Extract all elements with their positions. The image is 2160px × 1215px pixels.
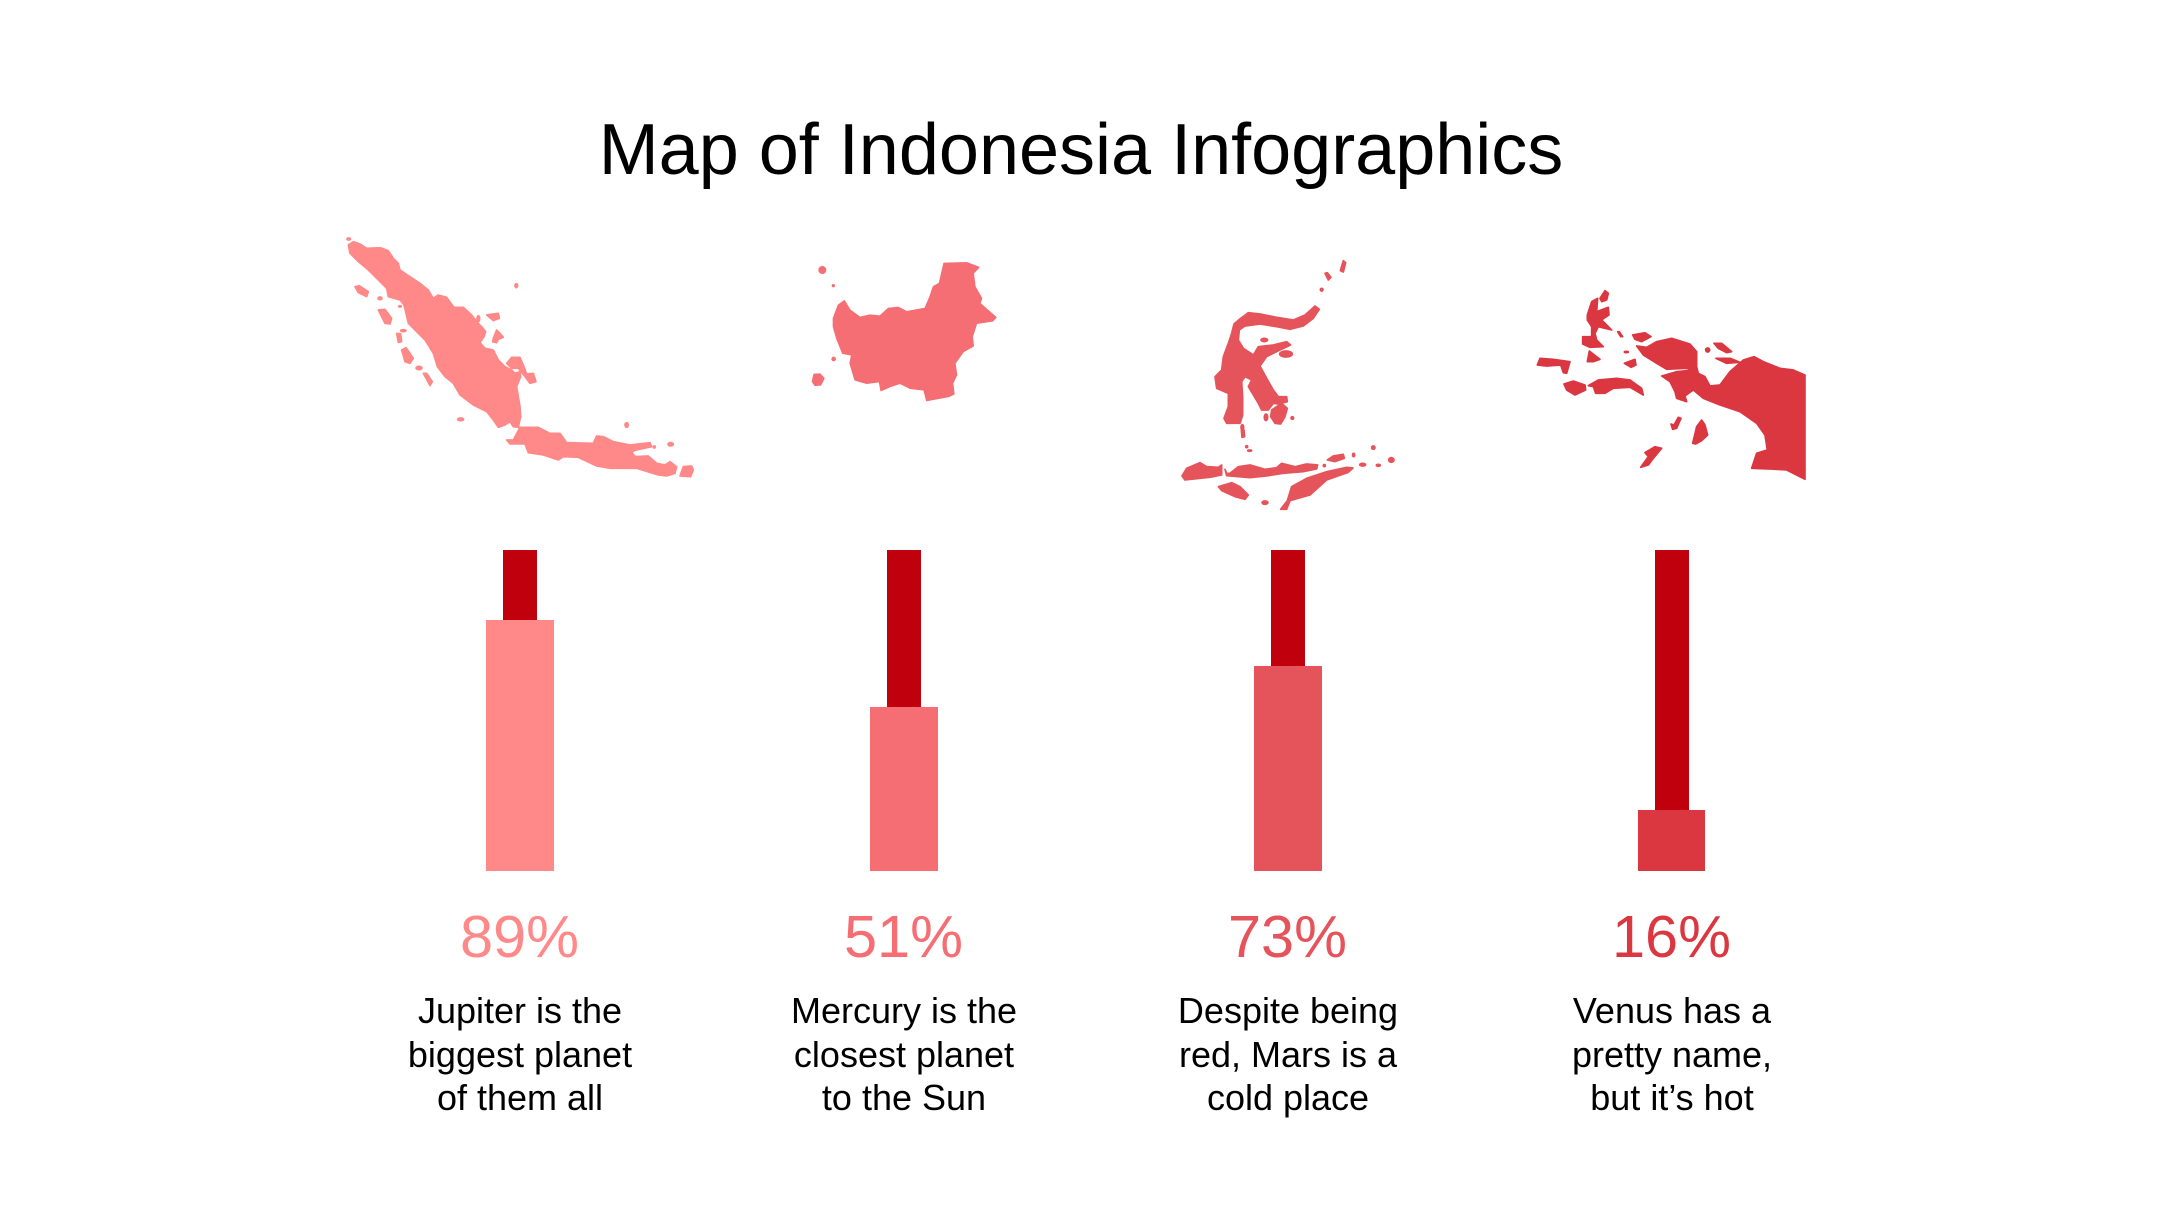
value bar	[870, 707, 938, 871]
map: Sumatra and Java	[347, 238, 693, 477]
map: Kalimantan	[812, 263, 996, 401]
track	[887, 550, 921, 707]
bar chart column 1	[486, 550, 554, 871]
description Mars: red, Mars is a	[1179, 1034, 1397, 1074]
description Mars: Despite being	[1178, 990, 1398, 1031]
description Jupiter: of them all	[437, 1077, 603, 1118]
description Venus: but it’s hot	[1590, 1077, 1754, 1118]
track	[1271, 550, 1305, 666]
description Venus: Venus has a	[1573, 990, 1771, 1031]
description Mercury: to the Sun	[822, 1077, 986, 1118]
bar chart column 3	[1254, 550, 1322, 871]
title: Map of Indonesia Infographics	[599, 110, 1563, 190]
description Mercury: closest planet	[794, 1034, 1014, 1074]
description Mercury: Mercury is the	[791, 990, 1017, 1031]
bar chart column 2	[870, 550, 938, 871]
description Mars	[1178, 990, 1398, 1118]
description Venus: pretty name,	[1572, 1034, 1772, 1074]
description Jupiter: Jupiter is the	[418, 990, 622, 1031]
value bar	[486, 620, 554, 871]
percentage 51%: 51%	[844, 903, 963, 970]
value bar	[1638, 810, 1705, 871]
map: Maluku and Papua	[1537, 291, 1805, 479]
description Mars: cold place	[1207, 1077, 1369, 1118]
map: Sulawesi and Nusa Tenggara	[1182, 261, 1394, 509]
percentage 89%: 89%	[460, 903, 579, 970]
description Jupiter	[408, 990, 632, 1118]
track	[503, 550, 537, 620]
percentage 16%: 16%	[1612, 903, 1731, 970]
description Venus	[1572, 990, 1772, 1118]
description Jupiter: biggest planet	[408, 1034, 632, 1074]
percentage 73%: 73%	[1228, 903, 1347, 970]
description Mercury	[791, 990, 1017, 1118]
value bar	[1254, 666, 1322, 871]
track	[1655, 550, 1689, 810]
bar chart column 4	[1638, 550, 1705, 871]
